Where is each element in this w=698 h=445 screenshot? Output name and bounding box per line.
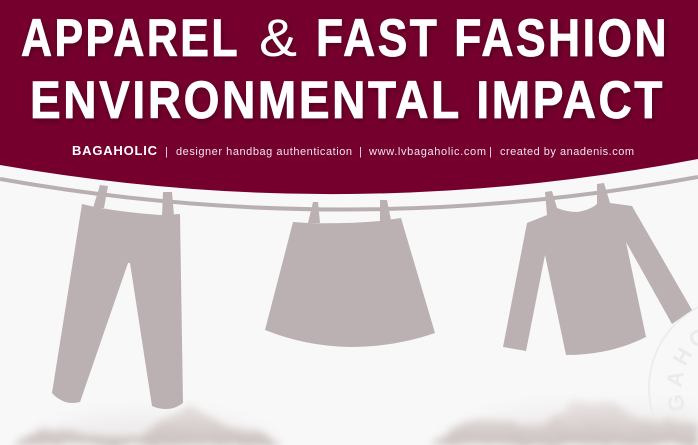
title — [21, 9, 669, 130]
credits line: designer handbag authentication — [176, 146, 352, 158]
credits line: BAGAHOLIC — [72, 143, 158, 158]
credits line: | — [165, 146, 168, 158]
title: APPAREL — [21, 9, 240, 68]
header band — [0, 0, 698, 194]
title: & — [259, 9, 297, 68]
clothesline rope — [0, 177, 698, 210]
icon: sweater on the line — [503, 183, 692, 355]
icon: pants on the line — [52, 185, 183, 409]
icon: skirt on the line — [265, 200, 435, 347]
smoke clouds — [10, 402, 698, 445]
credits line: www.lvbagaholic.com — [368, 146, 486, 158]
credits line: | — [359, 146, 362, 158]
credits line: | — [489, 146, 492, 158]
credits line — [72, 143, 634, 158]
credits line: created by anadenis.com — [500, 146, 634, 158]
watermark seal — [648, 306, 698, 408]
